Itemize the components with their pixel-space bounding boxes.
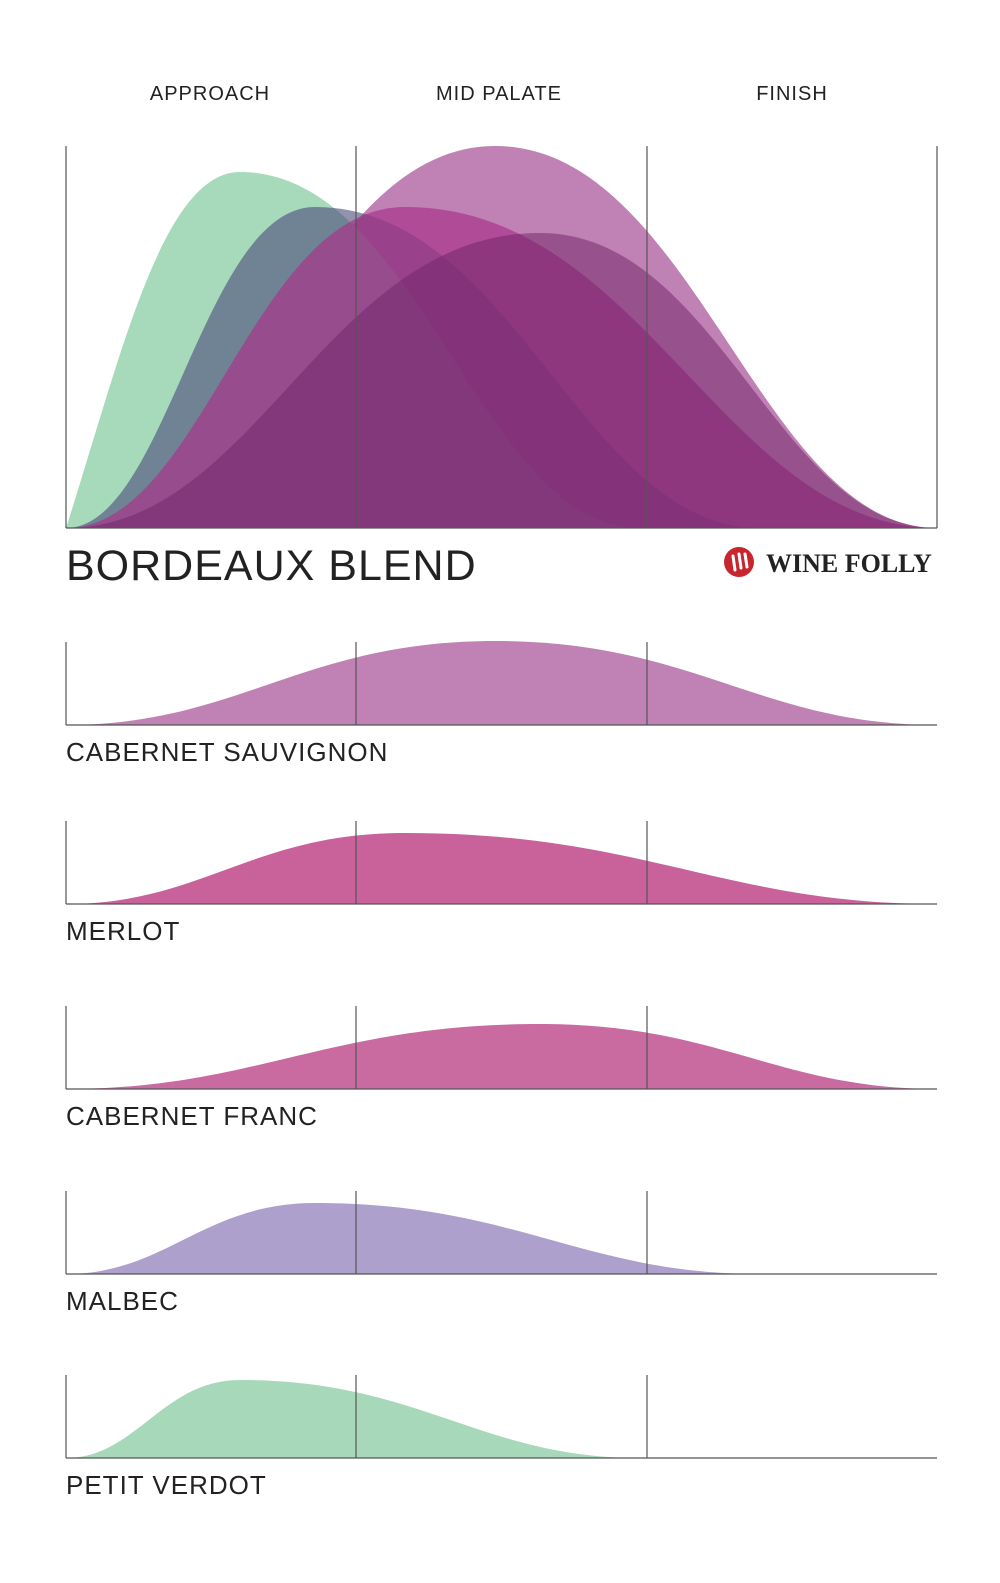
chart: merlot: MERLOT (66, 916, 180, 946)
column headings: MID PALATE (436, 83, 562, 105)
chart: merlot (66, 821, 937, 946)
main blend chart (66, 146, 937, 528)
column headings: FINISH (756, 83, 828, 105)
column headings (150, 83, 828, 105)
chart: cabernet sauvignon (66, 641, 937, 767)
chart: malbec: MALBEC (66, 1286, 179, 1316)
title: BORDEAUX BLEND (66, 542, 477, 590)
column headings: APPROACH (150, 83, 270, 105)
chart: petit verdot: PETIT VERDOT (66, 1470, 267, 1500)
chart: cabernet franc: CABERNET FRANC (66, 1101, 318, 1131)
chart: cabernet sauvignon: CABERNET SAUVIGNON (66, 737, 388, 767)
logo: wine folly: WINE FOLLY (766, 549, 932, 578)
chart: malbec (66, 1191, 937, 1316)
chart: cabernet franc (66, 1006, 937, 1131)
chart: petit verdot (66, 1375, 937, 1500)
